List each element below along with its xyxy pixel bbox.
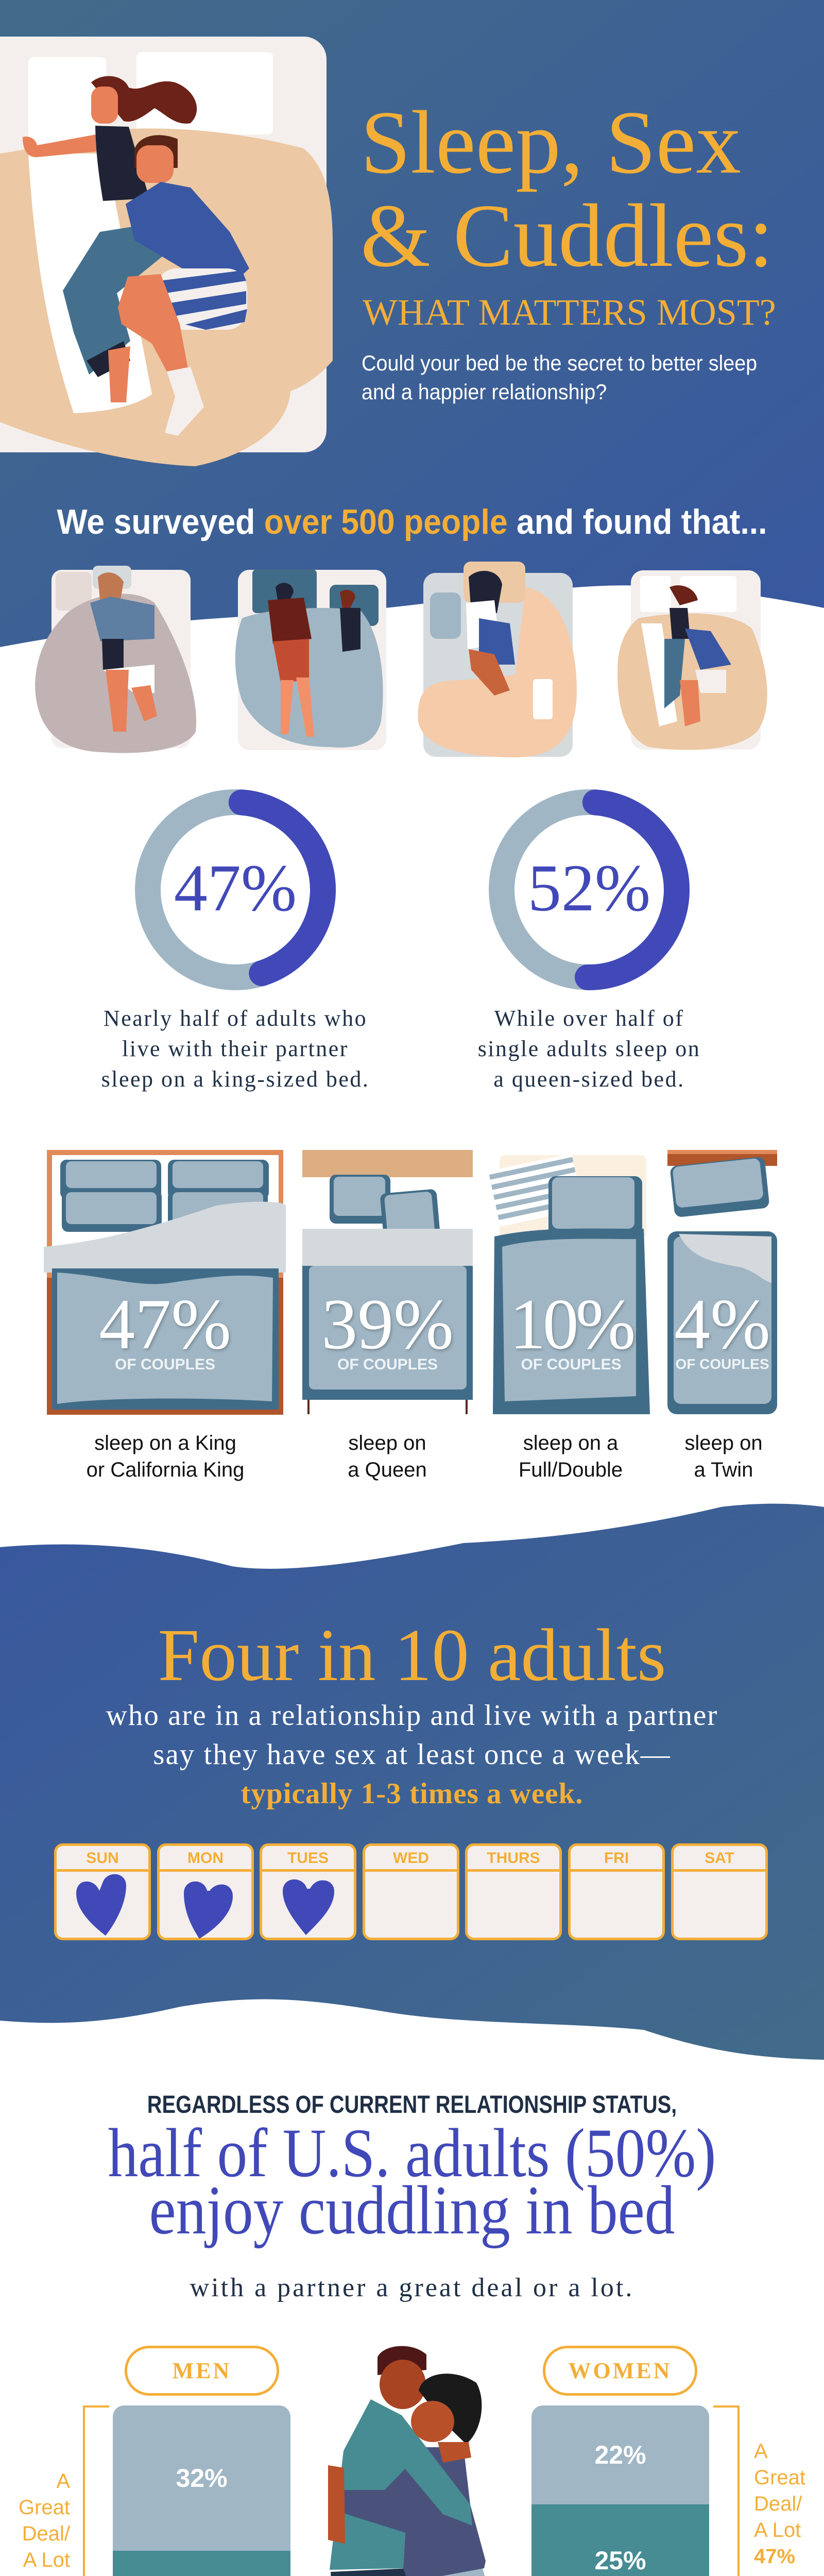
bed: king <box>44 1150 777 1415</box>
title: Sleep, Sex <box>360 92 741 192</box>
day: mon: MON <box>187 1850 224 1867</box>
bed stat: full 10%: 10% <box>510 1284 632 1364</box>
bed label: queen <box>348 1432 427 1481</box>
stacked bar: women <box>531 2405 709 2576</box>
label pill: women <box>543 2346 697 2396</box>
photo row: couples in bed <box>35 562 767 757</box>
donut label 47%: 47% <box>174 851 297 925</box>
donut chart: 52% queen <box>489 789 690 990</box>
sex frequency text <box>106 1699 718 1810</box>
bracket label: men 58% <box>19 2470 70 2576</box>
day: fri <box>568 1843 665 1940</box>
bed label: full: sleep on a <box>523 1432 618 1454</box>
headline: half of US adults: enjoy cuddling in bed <box>149 2172 675 2249</box>
sex frequency text: say they have sex at least once a week— <box>153 1738 671 1771</box>
bed label: queen: a Queen <box>348 1459 427 1481</box>
bed stat: twin 4%: 4% <box>674 1284 770 1364</box>
bed label: king <box>87 1432 244 1481</box>
day: tues: TUES <box>287 1850 329 1867</box>
bed stat: king 47%: OF COUPLES <box>115 1356 215 1373</box>
bed label: twin <box>684 1432 763 1481</box>
donut chart: 47% king <box>135 789 336 990</box>
bracket label: women 47%: 47% <box>754 2545 795 2568</box>
bracket label: men 58%: Deal/ <box>22 2522 70 2545</box>
bed stat: queen 39%: OF COUPLES <box>337 1356 438 1373</box>
label pill: men: MEN <box>173 2358 231 2383</box>
day: sat: SAT <box>705 1850 734 1867</box>
sex frequency text: typically 1-3 times a week. <box>241 1777 583 1810</box>
day: thurs: THURS <box>487 1850 540 1867</box>
intro question: and a happier relationship? <box>362 380 607 404</box>
day: sat <box>671 1843 768 1940</box>
caption: king-sized: live with their partner <box>122 1036 349 1061</box>
caption: queen-sized: a queen-sized bed. <box>493 1066 685 1092</box>
stacked bar: women: 22% <box>594 2441 646 2469</box>
day: thurs <box>465 1843 562 1940</box>
bracket label: men 58%: Great <box>19 2496 70 2519</box>
caption: queen-sized: single adults sleep on <box>478 1036 700 1061</box>
day: tues <box>260 1843 356 1940</box>
bed stat: twin 4%: OF COUPLES <box>675 1356 769 1372</box>
survey heading: We surveyed over 500 people and found that... <box>57 502 767 541</box>
bracket label: women 47% <box>754 2440 805 2568</box>
bed label: full: Full/Double <box>519 1459 623 1481</box>
caption: king-sized <box>101 1006 369 1092</box>
hero background <box>0 0 824 647</box>
caption: queen-sized <box>478 1006 700 1092</box>
bed label: king: or California King <box>87 1459 244 1481</box>
intro question: Could your bed be the secret to better sleep <box>362 351 757 375</box>
day: sun: SUN <box>86 1850 119 1867</box>
caption: queen-sized: While over half of <box>494 1006 684 1031</box>
hero illustration: couple spooning in bed <box>0 37 333 466</box>
bed label: full <box>519 1432 623 1481</box>
sex frequency text: who are in a relationship and live with a partner <box>106 1699 718 1732</box>
bracket label: women 47%: Great <box>754 2466 805 2489</box>
day: wed <box>363 1843 459 1940</box>
illustration: couple hugging <box>328 2346 486 2576</box>
bed stat: queen 39%: 39% <box>321 1284 454 1364</box>
subheadline: with a partner a great deal or a lot. <box>190 2273 634 2302</box>
day: fri: FRI <box>604 1850 629 1867</box>
caption: king-sized: Nearly half of adults who <box>104 1006 367 1031</box>
bracket: men great deal/a lot <box>83 2405 109 2576</box>
bracket label: women 47%: A Lot <box>754 2519 801 2541</box>
day: mon <box>157 1843 254 1940</box>
heading: four in 10 adults: Four in 10 adults <box>158 1614 666 1697</box>
stacked bar: women: 25% <box>594 2546 646 2575</box>
bed label: queen: sleep on <box>348 1432 426 1454</box>
label pill: men <box>125 2346 279 2396</box>
subtitle: what matters most: WHAT MATTERS MOST? <box>363 292 776 333</box>
day: wed: WED <box>393 1850 429 1867</box>
bracket label: men 58%: A <box>56 2470 70 2493</box>
title line 2: & Cuddles: <box>360 185 774 285</box>
intro question <box>362 351 757 404</box>
bracket label: men 58%: A Lot <box>23 2549 70 2571</box>
donut label 52%: 52% <box>528 851 650 925</box>
kicker: regardless of relationship status: REGARDLESS OF CURRENT RELATIONSHIP STATUS, <box>147 2091 677 2119</box>
bed stat: king 47%: 47% <box>99 1284 231 1364</box>
bed label: twin: a Twin <box>694 1459 753 1481</box>
bed label: twin: sleep on <box>684 1432 763 1454</box>
stacked bar: men: 32% <box>176 2464 228 2493</box>
label pill: women: WOMEN <box>569 2358 672 2383</box>
weekly calendar <box>54 1843 768 1940</box>
bracket label: women 47%: Deal/ <box>754 2493 802 2515</box>
caption: king-sized: sleep on a king-sized bed. <box>101 1066 369 1092</box>
bracket: women great deal/a lot <box>713 2405 740 2576</box>
headline: half of US adults <box>108 2115 716 2249</box>
bracket label: women 47%: A <box>754 2440 768 2463</box>
bed stat: full 10%: OF COUPLES <box>521 1356 621 1373</box>
bed label: king: sleep on a King <box>94 1432 236 1454</box>
sex frequency band background <box>0 1503 824 2060</box>
day: sun <box>54 1843 151 1940</box>
headline: half of US adults: half of U.S. adults (50%) <box>108 2115 716 2192</box>
